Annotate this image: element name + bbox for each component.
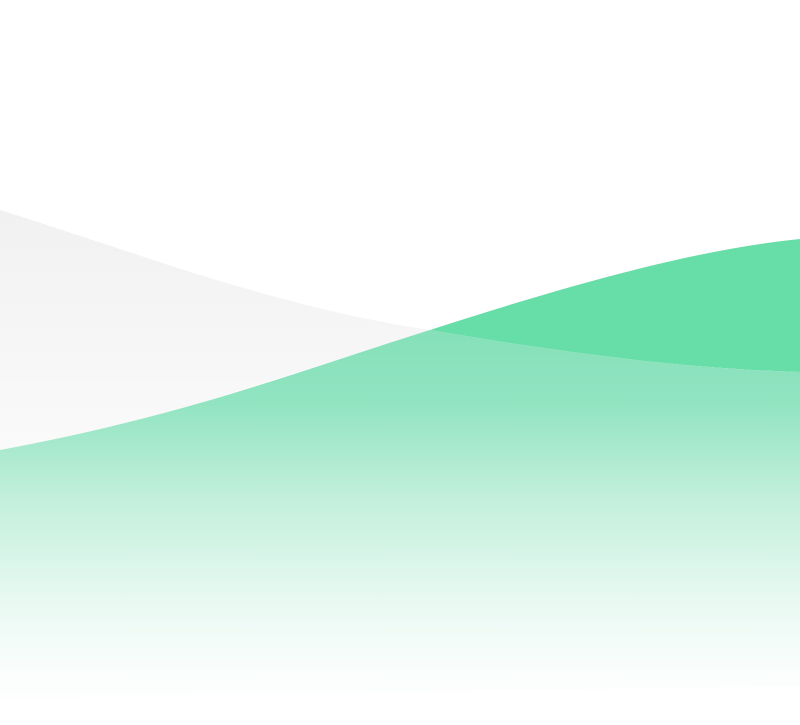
- green wave, right region: [430, 239, 800, 372]
- grey wave, left region: [0, 210, 430, 450]
- faded green overlap region: [0, 330, 800, 699]
